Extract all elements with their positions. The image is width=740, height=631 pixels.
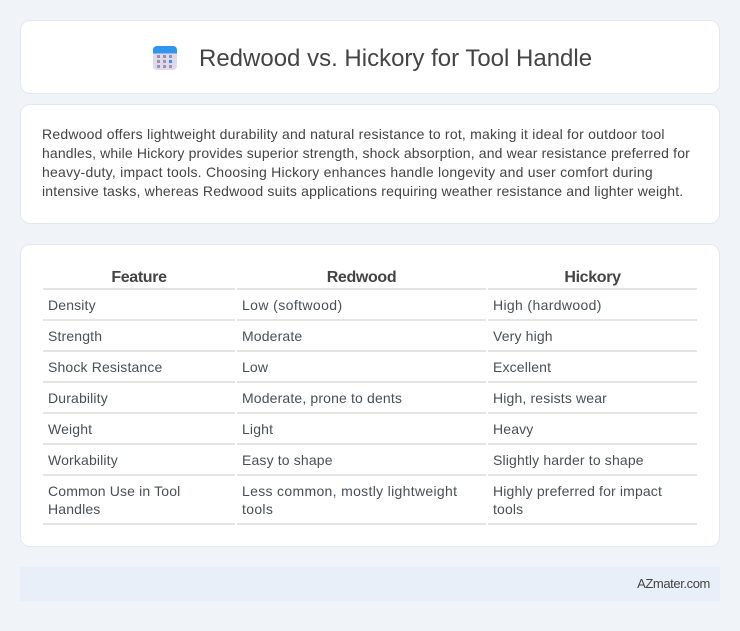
- summary text: Redwood offers lightweight durability and natural resistance to rot, making it ideal for outdoor tool: [42, 126, 665, 142]
- row: Weight: [43, 421, 697, 445]
- row: Strength: Moderate: [242, 328, 302, 344]
- summary text: intensive tasks, whereas Redwood suits applications requiring weather resistance and lighter weight.: [42, 183, 683, 199]
- row: Density: High (hardwood): [493, 297, 602, 313]
- icon: calendar: [153, 46, 177, 70]
- row: Common Use in Tool Handles: tools: [242, 501, 273, 517]
- summary text: [42, 126, 690, 199]
- header row: Hickory: [564, 269, 621, 286]
- row: Common Use in Tool Handles: Less common, mostly lightweight: [242, 483, 457, 499]
- summary text: heavy-duty, impact tools. Choosing Hickory enhances handle longevity and user comfort during: [42, 164, 653, 180]
- row: Common Use in Tool Handles: Highly preferred for impact: [493, 483, 662, 499]
- row: Workability: Workability: [48, 452, 118, 468]
- header row: [43, 269, 697, 290]
- header row: Feature: [111, 269, 167, 286]
- comparison table: [43, 269, 697, 525]
- title card: [20, 20, 720, 94]
- table card: [20, 244, 720, 547]
- row: Common Use in Tool Handles: tools: [493, 501, 523, 517]
- row: Durability: [43, 390, 697, 414]
- row: Common Use in Tool Handles: Common Use in Tool: [48, 483, 180, 499]
- row: Shock Resistance: Shock Resistance: [48, 359, 162, 375]
- row: Strength: [43, 328, 697, 352]
- row: Workability: [43, 452, 697, 476]
- row: Durability: Moderate, prone to dents: [242, 390, 402, 406]
- row: Strength: Very high: [493, 328, 553, 344]
- title: Redwood vs. Hickory for Tool Handle: [199, 45, 592, 72]
- row: Durability: High, resists wear: [493, 390, 607, 406]
- row: Shock Resistance: Excellent: [493, 359, 551, 375]
- row: Common Use in Tool Handles: Handles: [48, 501, 100, 517]
- row: Weight: Weight: [48, 421, 92, 437]
- summary text: handles, while Hickory provides superior strength, shock absorption, and wear resistance preferred for: [42, 145, 690, 161]
- row: Shock Resistance: Low: [242, 359, 268, 375]
- footer bar: [20, 567, 720, 601]
- header row: Redwood: [327, 269, 396, 286]
- row: Shock Resistance: [43, 359, 697, 383]
- row: Density: Low (softwood): [242, 297, 343, 313]
- row: Workability: Easy to shape: [242, 452, 333, 468]
- summary card: [20, 104, 720, 224]
- row: Durability: Durability: [48, 390, 108, 406]
- footer credit: AZmater.com: [637, 576, 710, 591]
- row: Density: Density: [48, 297, 96, 313]
- row: Workability: Slightly harder to shape: [493, 452, 644, 468]
- row: Weight: Heavy: [493, 421, 533, 437]
- row: Common Use in Tool Handles: [43, 483, 697, 525]
- row: Strength: Strength: [48, 328, 102, 344]
- row: Density: [43, 297, 697, 321]
- row: Weight: Light: [242, 421, 273, 437]
